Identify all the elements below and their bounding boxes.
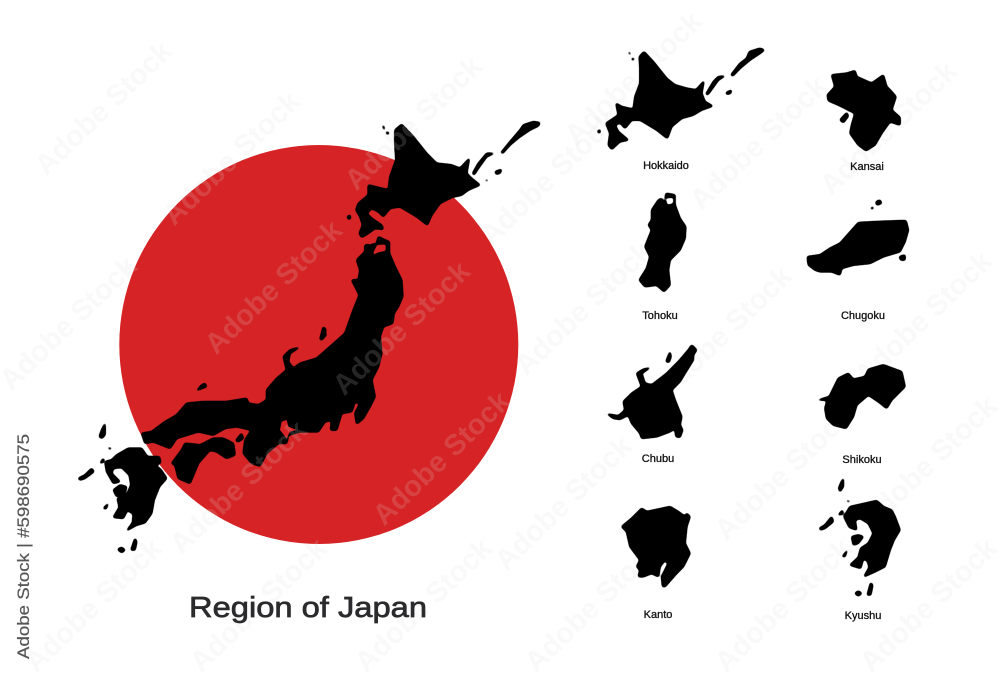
watermark: Adobe Stock bbox=[509, 235, 659, 382]
northern islands bbox=[347, 122, 540, 219]
watermark: Adobe Stock bbox=[339, 50, 489, 197]
watermark: Adobe Stock bbox=[327, 255, 477, 402]
Kyushu label: Kyushu bbox=[845, 610, 881, 622]
region: Kansai bbox=[827, 71, 900, 173]
Tohoku map icon bbox=[639, 193, 686, 292]
Tohoku label: Tohoku bbox=[642, 310, 678, 322]
region: Hokkaido bbox=[597, 48, 764, 172]
watermark: Adobe Stock bbox=[489, 430, 639, 577]
Kansai label: Kansai bbox=[850, 161, 884, 173]
Shikoku label: Shikoku bbox=[842, 454, 882, 466]
Ise bay bbox=[280, 420, 297, 438]
watermark: Adobe Stock bbox=[367, 385, 517, 532]
southwestern islands bbox=[78, 423, 137, 553]
Chugoku label: Chugoku bbox=[841, 310, 885, 322]
watermark: Adobe Stock bbox=[29, 35, 179, 182]
Honshu island bbox=[142, 237, 403, 466]
watermark: Adobe Stock bbox=[157, 85, 307, 232]
watermark: Adobe Stock bbox=[649, 260, 799, 407]
region: Kanto bbox=[622, 507, 690, 621]
stock id side text: Adobe Stock | #598690575 bbox=[14, 434, 33, 659]
region: Chugoku bbox=[807, 200, 908, 322]
watermark: Adobe Stock bbox=[164, 414, 314, 561]
Kansai map icon bbox=[827, 71, 900, 151]
map: Japan full silhouette bbox=[78, 122, 540, 553]
region: Chubu bbox=[607, 345, 697, 465]
Kanto label: Kanto bbox=[644, 609, 672, 621]
region: Tohoku bbox=[639, 193, 686, 322]
watermark: Adobe Stock bbox=[849, 245, 999, 392]
Kyushu map icon bbox=[819, 478, 900, 596]
Hokkaido label: Hokkaido bbox=[643, 160, 689, 172]
watermark: Adobe Stock bbox=[474, 105, 624, 252]
Kanto map icon bbox=[622, 507, 690, 587]
Chugoku map icon bbox=[807, 200, 908, 275]
red sun circle bbox=[119, 145, 518, 544]
watermark: Adobe Stock bbox=[854, 390, 1000, 537]
title: Region of Japan bbox=[189, 592, 427, 624]
Hokkaido map icon bbox=[597, 48, 764, 149]
watermark: Adobe Stock bbox=[814, 55, 964, 202]
region: Kyushu bbox=[819, 478, 900, 622]
Chubu map icon bbox=[607, 345, 697, 438]
watermark: Adobe Stock bbox=[709, 400, 859, 547]
small inland islands bbox=[197, 327, 327, 442]
Hokkaido island bbox=[356, 124, 480, 237]
watermark: Adobe Stock bbox=[559, 5, 709, 152]
Kyushu island bbox=[105, 448, 167, 531]
watermark: Adobe Stock bbox=[684, 70, 834, 217]
region: Shikoku bbox=[818, 365, 905, 466]
Shikoku island bbox=[172, 438, 235, 483]
Shikoku map icon bbox=[818, 365, 905, 428]
Chubu label: Chubu bbox=[642, 453, 674, 465]
watermark: Adobe Stock bbox=[199, 214, 349, 361]
